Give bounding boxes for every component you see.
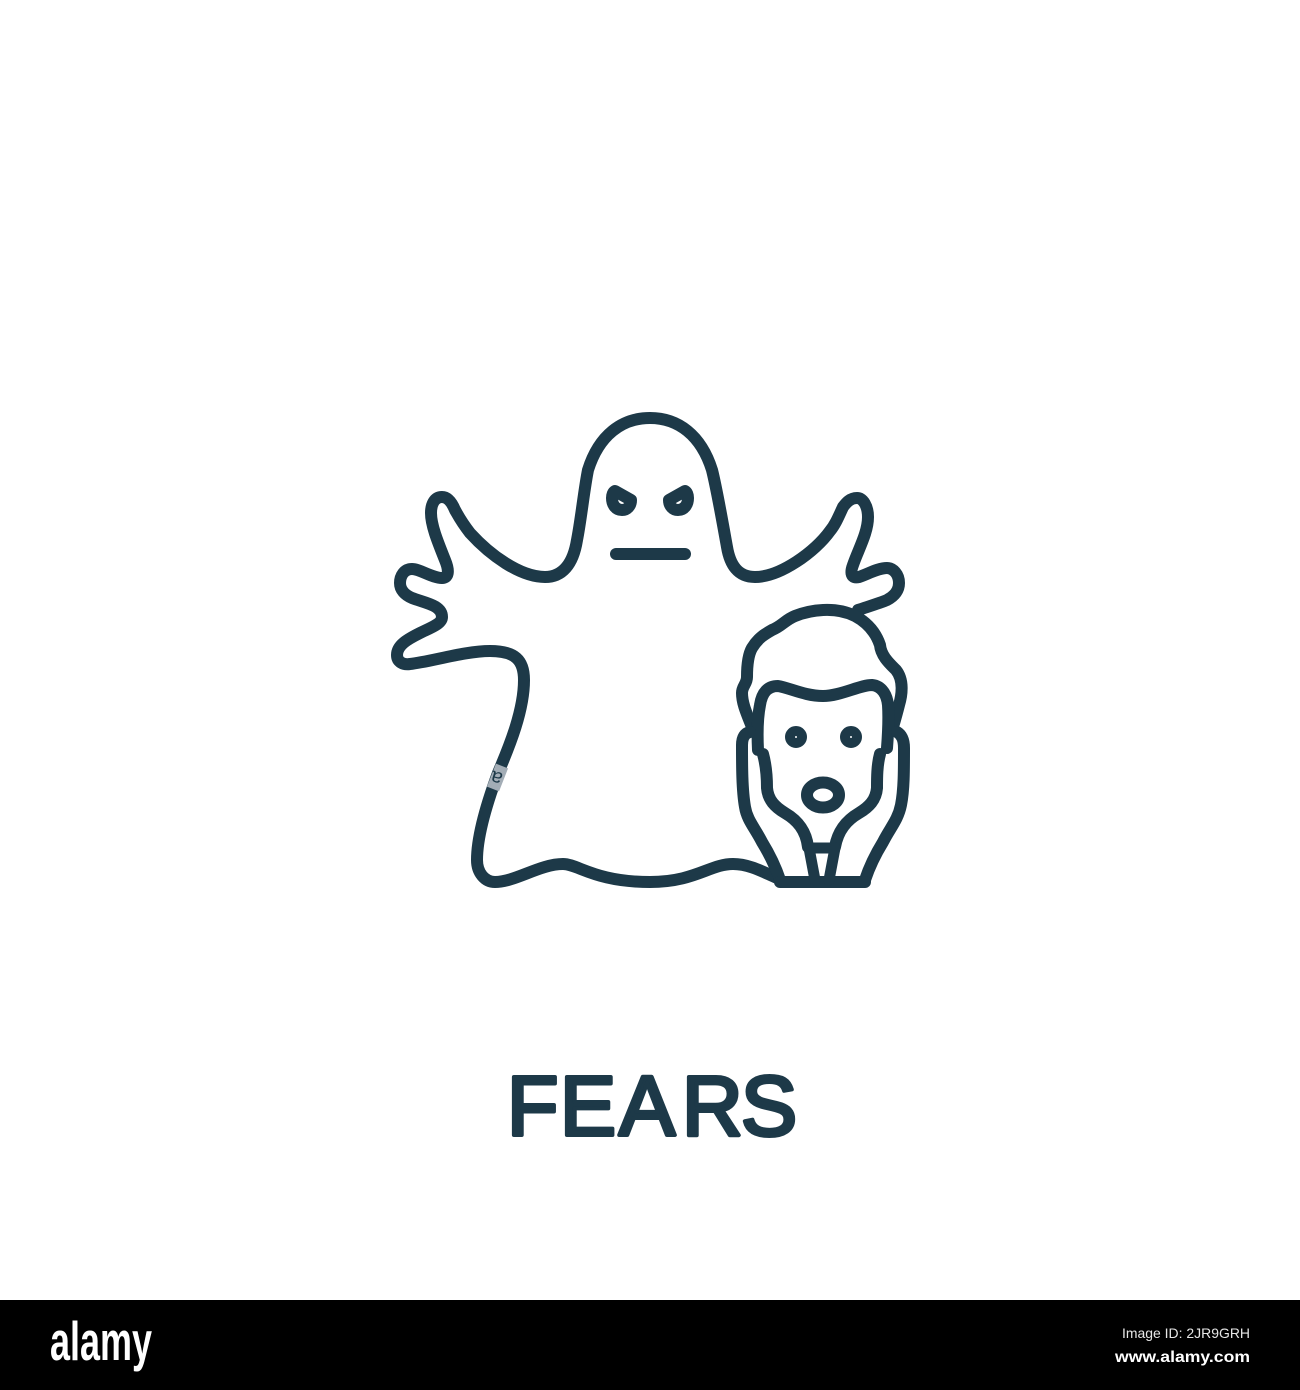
watermark fragment on ghost outline: a [487, 766, 505, 790]
open mouth [807, 782, 839, 808]
ghost [397, 418, 899, 882]
left eye [790, 731, 802, 743]
footer bar [0, 1300, 1300, 1390]
hair [742, 610, 902, 727]
ghost mouth [616, 548, 685, 560]
scared person [742, 610, 904, 882]
image id: Image ID: 2JR9GRH [1122, 1325, 1250, 1341]
ghost left eye [612, 491, 631, 510]
website: www.alamy.com [1114, 1349, 1250, 1366]
ghost body outline [397, 418, 899, 882]
logo: alamy [50, 1310, 152, 1372]
base line [780, 876, 865, 888]
left jaw [763, 754, 808, 847]
right jaw [835, 754, 880, 847]
ghost right eye [669, 491, 688, 510]
right hand [865, 732, 904, 880]
collar [809, 848, 835, 880]
right eye [845, 731, 857, 743]
face outline [758, 685, 888, 750]
left hand [742, 732, 780, 880]
icon: ghost scaring a person [391, 412, 910, 888]
